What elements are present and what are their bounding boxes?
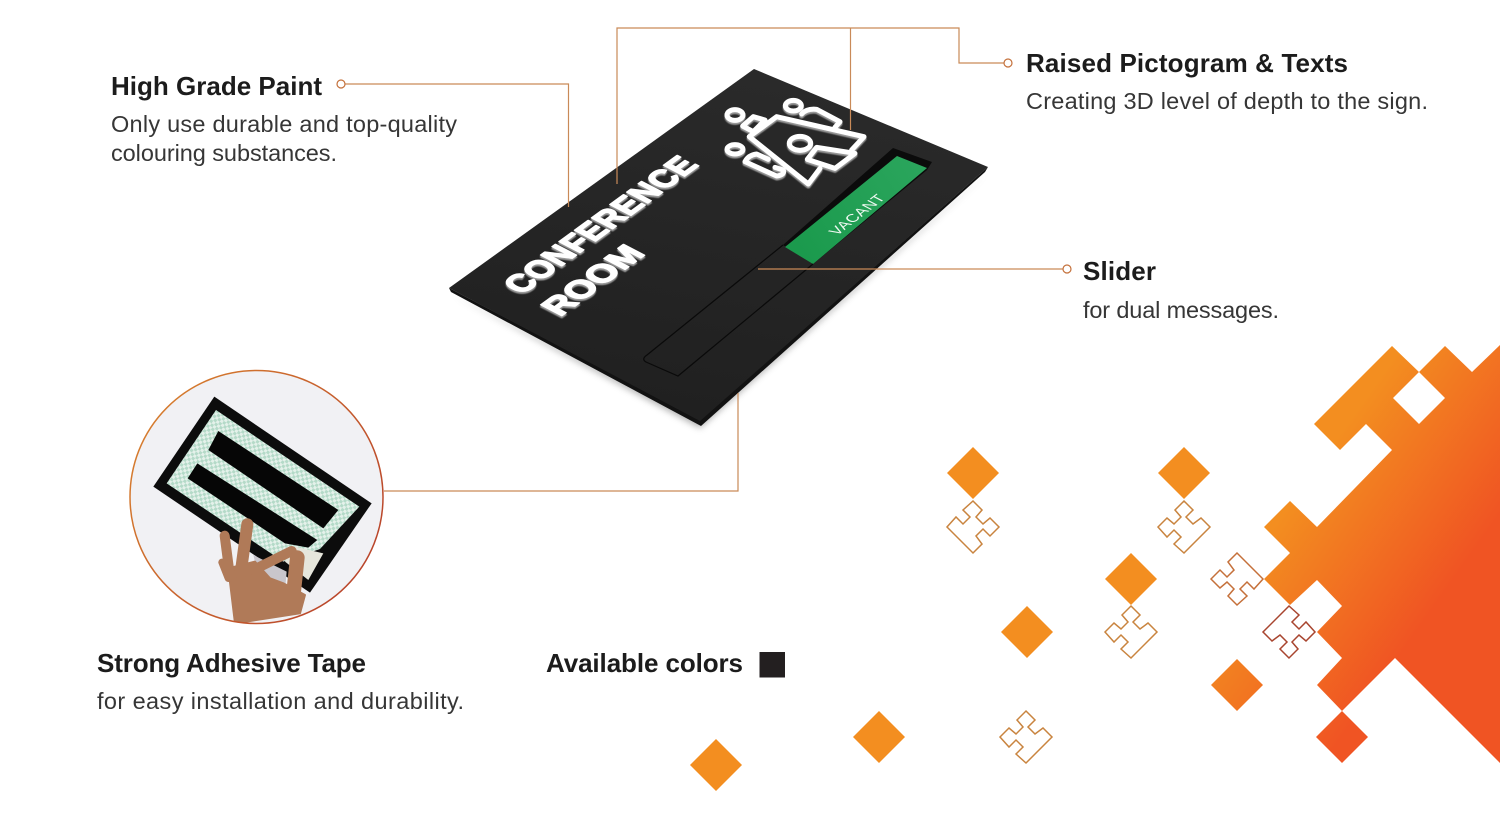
background orange pixel shape [1264, 345, 1500, 763]
slider tab outline [644, 245, 813, 376]
hand [222, 524, 305, 623]
peeled liner [285, 547, 323, 580]
decorative puzzle outlines [947, 501, 1315, 763]
callout: raised pictogram and texts: Creating 3D level of depth to the sign. [1026, 88, 1428, 114]
callout: strong adhesive tape: for easy installation and durability. [97, 688, 464, 714]
sign back [153, 397, 372, 593]
sign face [449, 69, 988, 421]
lower black strip [188, 463, 317, 548]
callout: slider: for dual messages. [1083, 297, 1279, 323]
available colors: Available colors [546, 648, 743, 678]
callout: high grade paint [111, 71, 457, 166]
sign shadow [452, 172, 988, 428]
leader line end dots [337, 59, 1071, 273]
slider slot [783, 148, 932, 264]
sign plate [449, 69, 988, 428]
callout: strong adhesive tape: Strong Adhesive Tape [97, 648, 366, 678]
black color swatch [760, 652, 785, 678]
callout: high grade paint: High Grade Paint [111, 71, 322, 101]
shadow under hand [253, 555, 287, 584]
meeting room pictogram [727, 100, 864, 184]
callout: high grade paint: Only use durable and top-quality [111, 111, 457, 137]
callout: high grade paint: colouring substances. [111, 140, 337, 166]
callout: slider: Slider [1083, 256, 1156, 286]
callout: slider [1083, 256, 1279, 323]
callout: strong adhesive tape [97, 648, 464, 714]
callout: raised pictogram and texts: Raised Pictogram & Texts [1026, 48, 1348, 78]
sign edge thickness [449, 167, 988, 426]
conference room text: CONFERENCE [494, 151, 706, 298]
upper black strip [208, 431, 338, 528]
adhesive tape photo circle [130, 370, 383, 624]
vacant label: VACANT [825, 192, 890, 238]
decorative orange diamonds [690, 447, 1368, 791]
tape [167, 410, 359, 562]
leader lines [345, 28, 1063, 491]
green slider panel [785, 156, 927, 264]
conference room text: ROOM [533, 240, 653, 321]
callout: raised pictogram and texts [1026, 48, 1428, 114]
